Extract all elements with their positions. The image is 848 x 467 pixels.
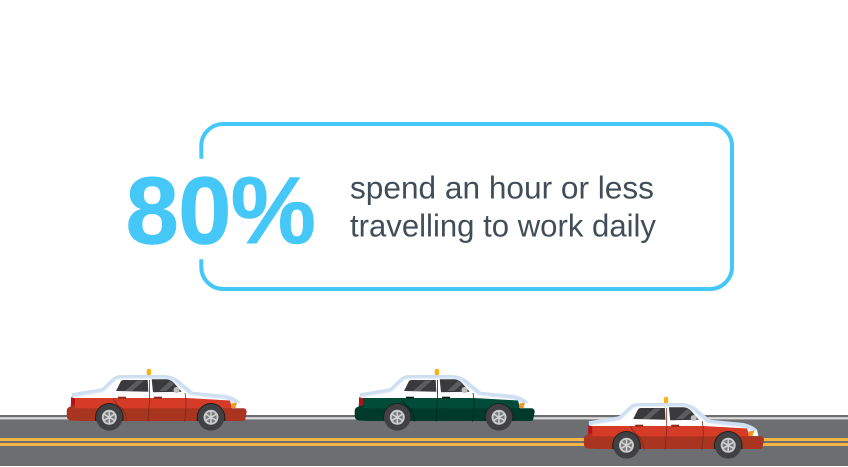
taxi: green, middle (355, 369, 535, 431)
statistic: 80%: 80% (126, 158, 316, 264)
taxi: red, left (67, 369, 247, 431)
taxi: red, right (584, 397, 764, 459)
description text: spend an hour or less (350, 170, 654, 206)
description text: travelling to work daily (350, 208, 656, 244)
description text (350, 170, 656, 244)
road (0, 415, 848, 466)
callout frame (201, 124, 732, 289)
